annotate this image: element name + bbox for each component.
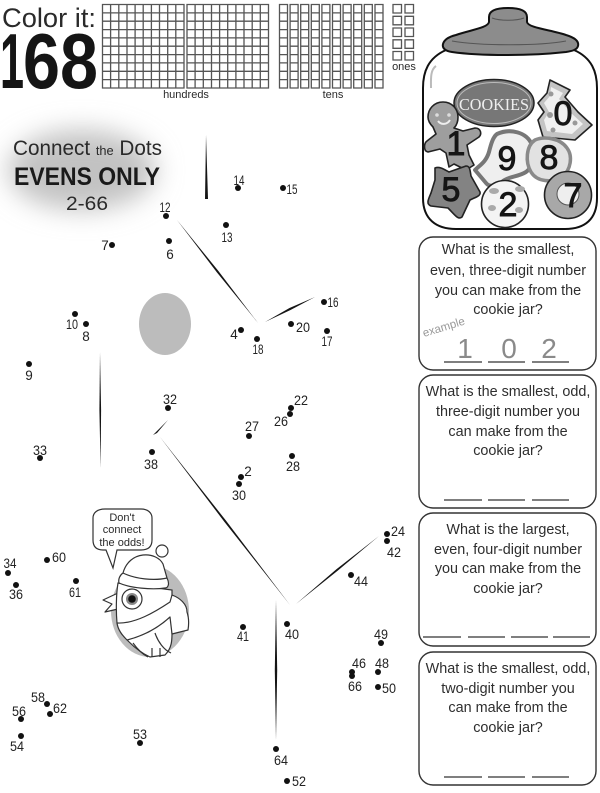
dot 56: 56 (12, 704, 26, 719)
answer lines (423, 636, 590, 638)
dot 13: 13 (222, 230, 232, 245)
dot 17 (322, 328, 332, 349)
dot 48: 48 (375, 656, 389, 671)
panel: question 3: cookie jar? (473, 581, 543, 597)
example answer: 0 (501, 333, 517, 364)
panel: question 4: two-digit number you (441, 681, 575, 697)
cookie: ring with 7 (544, 172, 592, 218)
dot 66: 66 (348, 679, 362, 694)
dot 12 (160, 200, 170, 219)
dot 30: 30 (232, 488, 246, 503)
label: hundreds: hundreds (163, 89, 209, 101)
dot 44 (348, 572, 368, 589)
connect-the-dots points (4, 173, 405, 789)
cookie: gingerbread with 1: 1 (447, 125, 465, 163)
dot 50 (375, 681, 396, 696)
cookie: chip with 2 (482, 180, 528, 228)
cookie jar illustration (423, 8, 597, 229)
dot 9 (25, 361, 33, 383)
dot 8 (82, 321, 90, 344)
dot 24 (384, 524, 405, 539)
dot 2 (238, 464, 252, 480)
dot 53: 53 (133, 727, 147, 742)
grid: hundreds blocks (102, 4, 268, 88)
scarf (117, 595, 189, 640)
dot 14 (234, 173, 245, 191)
example answer: 2 (541, 333, 557, 364)
dot 46: 46 (352, 656, 366, 671)
panel: question 4: What is the smallest, odd, (426, 661, 590, 677)
panel: question 2: cookie jar? (473, 443, 543, 459)
dot 54: 54 (10, 739, 24, 754)
dot 6: 6 (166, 247, 174, 262)
heading: number 168: 1 (0, 17, 24, 105)
dot 24: 24 (391, 524, 405, 539)
belly wing (133, 633, 171, 657)
panel: question 4 (419, 652, 596, 785)
dot 10: 10 (66, 317, 78, 332)
speech bubble: Don't (109, 512, 135, 524)
dot 41 (237, 624, 249, 644)
dot 36: 36 (9, 587, 23, 602)
picture: grey filled oval (139, 293, 191, 355)
panel: question 2 (419, 375, 596, 508)
dot 44: 44 (354, 574, 368, 589)
cookie: ring with 7: 7 (564, 177, 582, 215)
dot 22: 22 (294, 393, 308, 408)
dot 14: 14 (234, 173, 245, 188)
jar glass (423, 50, 597, 229)
dot 58 (31, 690, 50, 707)
panel: question 1: even, three-digit number (430, 263, 586, 279)
grid: tens blocks (280, 4, 383, 88)
picture: pre-drawn tapered lines (99, 135, 379, 740)
dot 38 (144, 449, 158, 472)
dot 13 (222, 222, 232, 245)
cookie: sprinkled with 8: 8 (540, 139, 558, 177)
answer lines (444, 499, 569, 501)
dot 7 (101, 238, 115, 253)
speech bubble: the odds! (99, 537, 145, 549)
dot 17: 17 (322, 334, 332, 349)
grey backdrop (111, 565, 189, 657)
dot 27: 27 (245, 419, 259, 434)
dot 52: 52 (292, 774, 306, 789)
dot 12: 12 (160, 200, 170, 215)
dot 64 (273, 746, 288, 768)
cookie: sprinkled with 8 (527, 138, 570, 181)
panel: question 3 (419, 513, 596, 646)
dot 30 (232, 481, 246, 503)
dot 40 (284, 621, 299, 642)
panel: question 2: What is the smallest, odd, (426, 384, 590, 400)
speech bubble: connect (103, 524, 141, 536)
dot 16 (321, 295, 338, 310)
panel: question 2: three-digit number you (436, 404, 580, 420)
dot 2: 2 (244, 464, 252, 479)
cookie: star with 5 (428, 166, 480, 218)
dot 49: 49 (374, 627, 388, 642)
panel: question 2: can make from the (448, 424, 568, 440)
dot 6 (166, 238, 174, 262)
dot 15: 15 (286, 182, 298, 197)
panel: question 1: What is the smallest, (442, 242, 574, 258)
dot 18: 18 (252, 342, 264, 357)
heading: color it: Color it: (2, 3, 96, 33)
label: ones: ones (392, 61, 416, 73)
dot 46 (349, 656, 366, 675)
panel: question 1: you can make from the (435, 283, 581, 299)
jar highlight (431, 66, 436, 88)
dot 18 (252, 336, 264, 357)
dot 20: 20 (296, 320, 310, 335)
title: range: 2-66 (66, 194, 108, 215)
beak (103, 593, 118, 612)
panel: question 1: cookie jar? (473, 302, 543, 318)
dot 26: 26 (274, 414, 288, 429)
eye (122, 589, 142, 609)
dot 42 (384, 538, 401, 560)
heading: number 168: 6 (23, 17, 60, 105)
dot 38: 38 (144, 457, 158, 472)
speech bubble (93, 509, 152, 568)
dot 61: 61 (69, 585, 81, 600)
dot 50: 50 (382, 681, 396, 696)
dot 54 (10, 733, 24, 754)
dot 61 (69, 578, 81, 600)
panel: question 1 (419, 237, 596, 370)
cookie: tree with 0 (538, 80, 592, 140)
dot 7: 7 (101, 238, 109, 253)
example tag: example (421, 316, 466, 340)
dot 4 (230, 327, 244, 342)
soft shadow behind title (8, 130, 156, 210)
title: connect the dots: Connect the Dots (13, 137, 162, 160)
panel: question 3: What is the largest, (446, 522, 570, 538)
example answer: 1 (457, 333, 473, 364)
dot 34: 34 (4, 556, 17, 571)
dot 22 (288, 393, 308, 411)
dot 60: 60 (52, 550, 66, 565)
panel: question 3: even, four-digit number (434, 542, 582, 558)
body (116, 583, 172, 657)
dot 20 (288, 320, 310, 335)
dot 26 (274, 411, 293, 429)
dot 52 (284, 774, 306, 789)
label: cookies oval: COOKIES (459, 95, 529, 114)
cookie: chip with 2: 2 (499, 186, 517, 224)
cookie: frosted with 9 (475, 131, 534, 186)
label: cookies oval (454, 80, 534, 126)
title: evens only: EVENS ONLY (14, 163, 160, 191)
dot 41: 41 (237, 629, 249, 644)
dot 28: 28 (286, 459, 300, 474)
dot 33: 33 (33, 443, 47, 458)
dot 60 (44, 550, 66, 565)
dot 15 (280, 182, 298, 197)
grid: ones blocks (393, 4, 414, 60)
dot 40: 40 (285, 627, 299, 642)
heading: number 168 (0, 17, 98, 105)
legs (152, 648, 160, 657)
dot 10 (66, 311, 78, 332)
panel: question 4: cookie jar? (473, 720, 543, 736)
pompom (156, 545, 168, 557)
bird mascot (93, 509, 189, 657)
title block (13, 137, 162, 215)
dot 66 (348, 673, 362, 694)
dot 64: 64 (274, 753, 288, 768)
dot 58: 58 (31, 690, 45, 705)
dot 32: 32 (163, 392, 177, 407)
heading: number 168: 8 (60, 17, 98, 105)
panel: question 3: you can make from the (435, 561, 581, 577)
cookie: star with 5: 5 (442, 171, 460, 209)
cookie: gingerbread with 1 (424, 102, 481, 170)
panel: question 4: can make from the (448, 700, 568, 716)
label: tens: tens (323, 89, 344, 101)
answer lines (444, 776, 569, 778)
cookie: frosted with 9: 9 (498, 140, 516, 178)
dot 9: 9 (25, 368, 33, 383)
cookie: tree with 0: 0 (554, 95, 572, 133)
hat (119, 555, 168, 589)
jar lid (443, 8, 578, 55)
dot 16: 16 (328, 295, 338, 310)
dot 42: 42 (387, 545, 401, 560)
example answer (444, 333, 569, 364)
dot 62: 62 (53, 701, 67, 716)
dot 28 (286, 453, 300, 474)
dot 4: 4 (230, 327, 238, 342)
hat band (123, 573, 167, 579)
dot 8: 8 (82, 329, 90, 344)
lid highlight (452, 18, 566, 45)
dot 62 (47, 701, 67, 717)
dot 34 (4, 556, 17, 576)
